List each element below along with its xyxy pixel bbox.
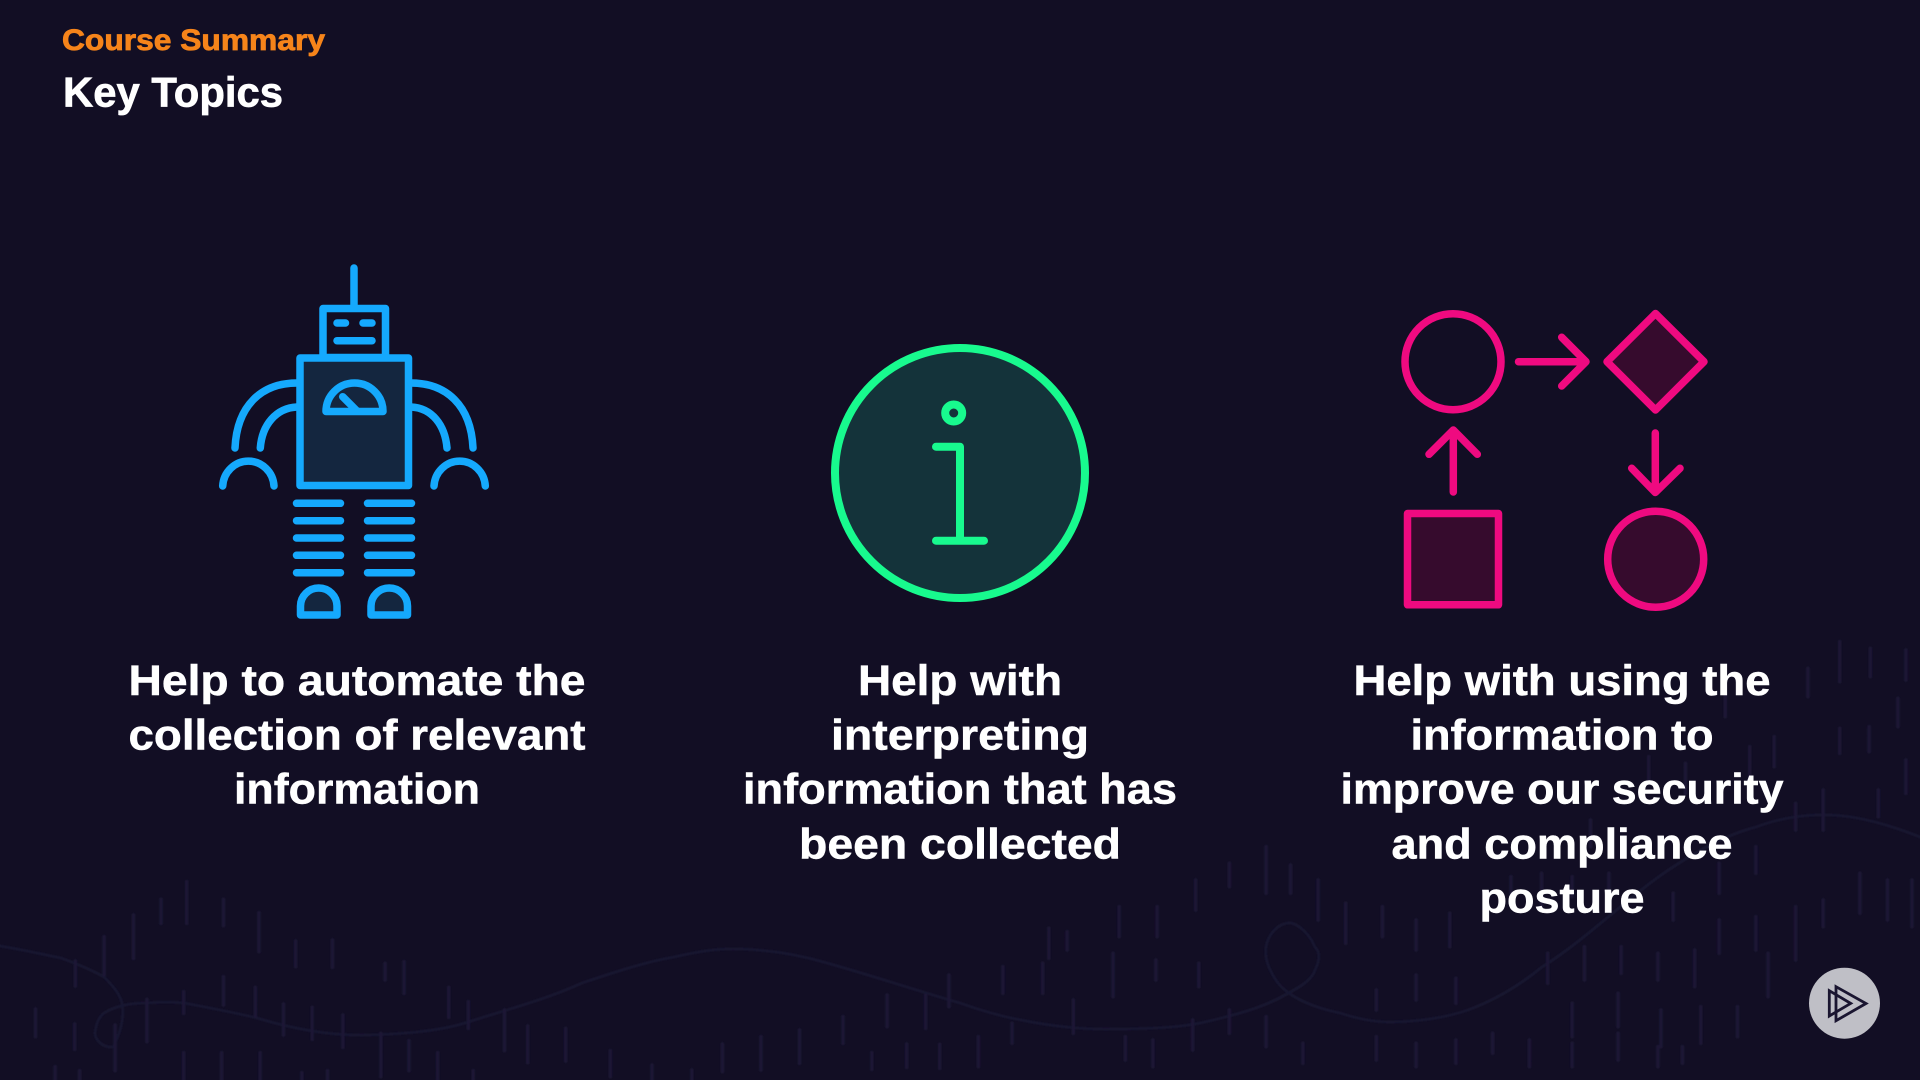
text: interpreting information: Help with (858, 657, 1062, 705)
text: automate collection: collection of relevant (128, 711, 586, 759)
icon: robot (223, 268, 485, 615)
eyebrow: Course Summary: Course Summary (62, 24, 325, 57)
text: security and compliance: posture (1480, 875, 1644, 923)
icon: information circle (835, 348, 1085, 598)
icon: process flow (1405, 314, 1704, 607)
text: interpreting information (743, 657, 1177, 868)
text: automate collection: Help to automate the (128, 657, 586, 705)
text: automate collection: information (234, 765, 480, 813)
title: Key Topics: Key Topics (63, 68, 283, 116)
text: automate collection (128, 657, 586, 813)
text: interpreting information: been collected (799, 820, 1121, 868)
text: security and compliance: improve our security (1340, 765, 1784, 813)
text: security and compliance: Help with using the (1354, 657, 1770, 705)
text: security and compliance: and compliance (1392, 820, 1732, 868)
text: interpreting information: interpreting (831, 711, 1089, 759)
text: security and compliance (1340, 657, 1784, 923)
text: security and compliance: information to (1410, 711, 1714, 759)
text: interpreting information: information that has (743, 765, 1177, 813)
icon: play logo badge (1809, 968, 1880, 1039)
